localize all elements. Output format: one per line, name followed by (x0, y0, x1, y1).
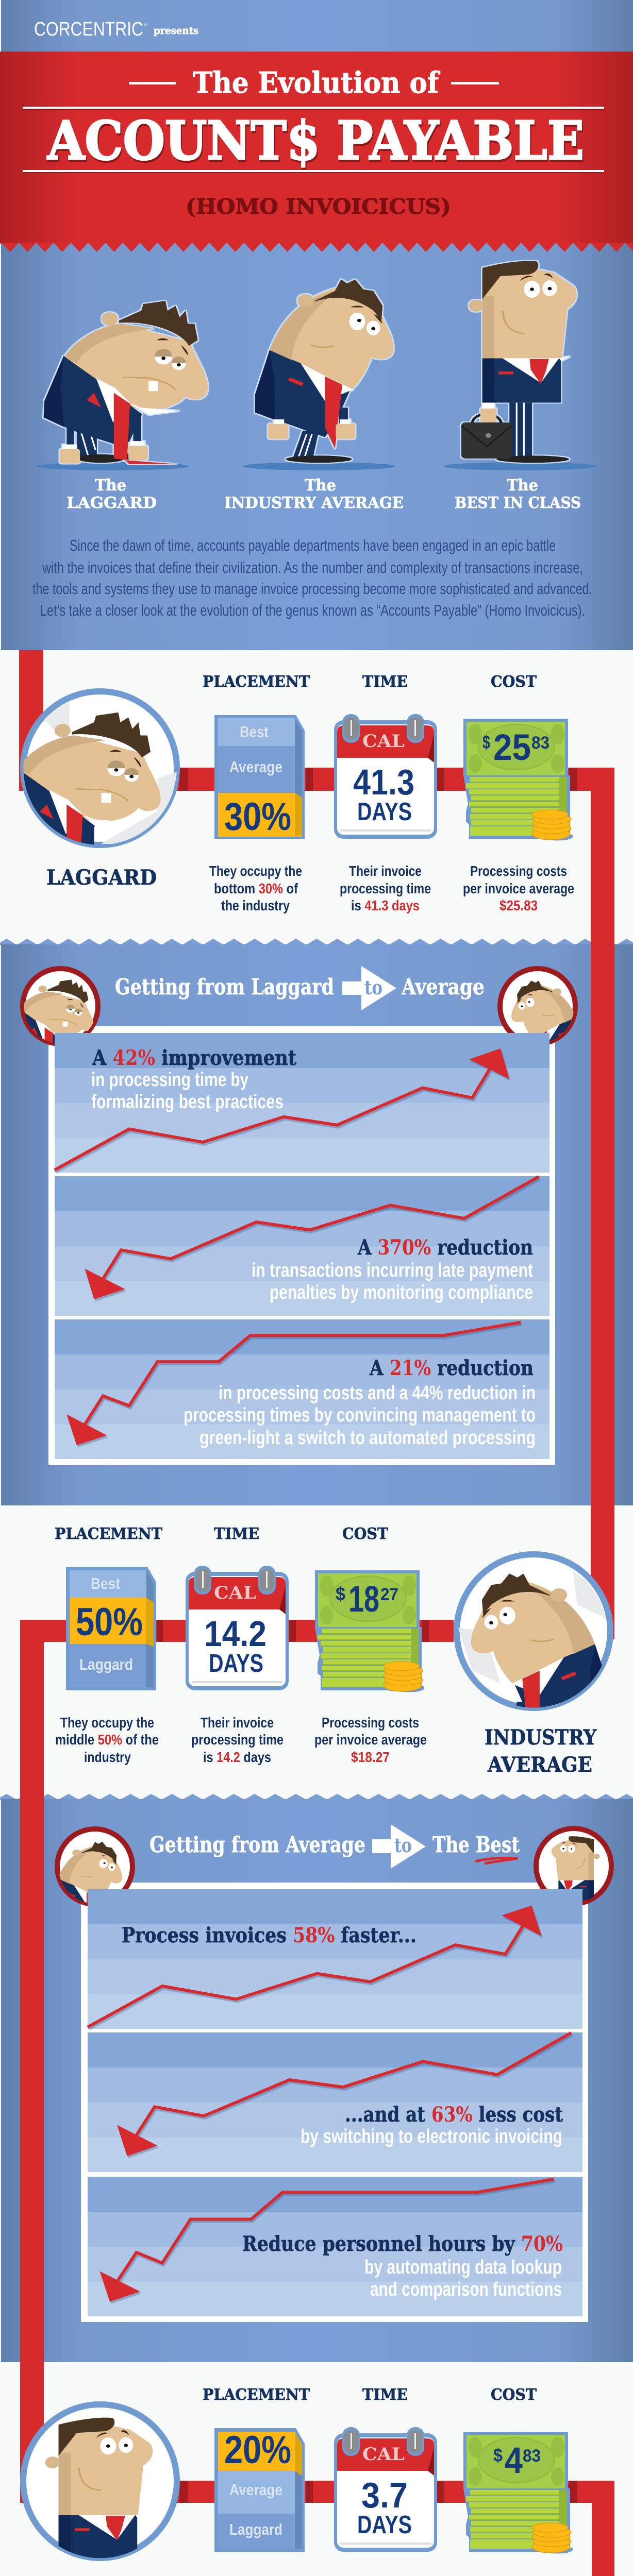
portrait: small average (497, 966, 578, 1045)
placement description (209, 863, 302, 913)
heading: Getting from Laggard (115, 974, 334, 999)
chart: 63% less cost: by switching to electronic invoicing (301, 2126, 562, 2147)
time description: is 41.3 days (351, 897, 420, 913)
money: $25.83 (463, 719, 573, 840)
chart: 370% reduction: penalties by monitoring compliance (270, 1282, 533, 1303)
placement description: They occupy the (60, 1715, 154, 1731)
column headings: COST (491, 2386, 537, 2404)
chart: 21% reduction: processing times by convincing management to (184, 1404, 536, 1426)
heading: Average (401, 974, 485, 999)
calendar: 41.3 days: CAL (362, 731, 405, 752)
chart: personnel hours 70%: Reduce personnel hours by 70% (242, 2232, 563, 2256)
placement tower: 30% (214, 715, 305, 839)
section background: laggard tips (0, 939, 633, 1505)
money: $25.83: 83 (531, 733, 549, 753)
calendar: 14.2 days: DAYS (209, 1650, 263, 1677)
time description (191, 1715, 284, 1765)
time description: Their invoice (201, 1715, 274, 1731)
portrait: industry average (454, 1551, 613, 1711)
banner: title red (0, 52, 633, 252)
panel: best in class stats (23, 2386, 574, 2576)
portrait: best (23, 2404, 177, 2576)
placement tower: 30%: Average (229, 758, 282, 776)
portrait: laggard (20, 688, 180, 848)
money: $4.83 (463, 2432, 573, 2553)
calendar: 14.2 days: CAL (214, 1583, 256, 1603)
placement description: bottom 30% of (214, 880, 298, 896)
panel: industry average stats (55, 1525, 610, 1777)
column headings (203, 673, 537, 691)
placement tower: 30%: Best (240, 723, 269, 741)
column headings: TIME (214, 1525, 259, 1543)
placement tower: 50%: 50% (76, 1600, 143, 1644)
placement tower: 20%: Laggard (229, 2520, 282, 2538)
logo: Corcentric presents: CORCENTRIC (34, 19, 143, 40)
money: $4.83: 83 (523, 2446, 541, 2466)
cost description (314, 1715, 427, 1765)
column headings: COST (491, 673, 537, 691)
character: the best in class: BEST IN CLASS (455, 494, 581, 512)
time description (340, 863, 431, 913)
chart: 21% reduction: A 21% reduction (369, 1356, 534, 1380)
placement tower: 30%: 30% (224, 795, 291, 839)
heading: to (364, 976, 382, 999)
calendar: 14.2 days (186, 1566, 289, 1690)
cost description: $18.27 (351, 1749, 390, 1765)
column headings: PLACEMENT (55, 1525, 163, 1543)
heading: to (394, 1834, 412, 1857)
cost description: Processing costs (322, 1715, 419, 1731)
character: the laggard (37, 301, 208, 512)
title: The Evolution of: The Evolution of (193, 66, 441, 100)
column headings (203, 2386, 537, 2404)
chart: 21% reduction: green-light a switch to automated processing (199, 1427, 536, 1449)
character: the laggard: The (95, 477, 126, 495)
heading (115, 966, 485, 1010)
time description: Their invoice (349, 863, 422, 879)
portrait: small best (534, 1826, 614, 1905)
chart frame (81, 1883, 588, 2322)
panel: getting from laggard to average (8, 966, 584, 1465)
money: $18.27: $ (336, 1583, 345, 1604)
section background: average tips (0, 1794, 633, 2362)
chart: personnel hours 70% (88, 2177, 582, 2316)
chart frame (48, 1026, 555, 1465)
intro paragraph (32, 536, 592, 619)
cost description: Processing costs (470, 863, 567, 879)
calendar: 3.7 days: 3.7 (361, 2475, 408, 2515)
placement tower: 20%: Average (229, 2481, 282, 2499)
column headings: TIME (362, 2386, 408, 2404)
red connector line (19, 650, 614, 2576)
money: $18.27: 18 (348, 1579, 379, 1620)
calendar: 3.7 days: DAYS (357, 2511, 412, 2539)
chart: 370% reduction: in transactions incurring late payment (252, 1260, 533, 1281)
placement description: They occupy the (209, 863, 302, 879)
chart: 370% reduction (55, 1176, 549, 1316)
logo: Corcentric presents: presents (154, 24, 198, 37)
column headings: COST (342, 1525, 389, 1543)
chart: 21% reduction (55, 1319, 549, 1459)
calendar: 3.7 days: CAL (362, 2444, 405, 2465)
time description: is 14.2 days (203, 1749, 271, 1765)
heading: The Best (432, 1832, 520, 1857)
money: $25.83: $ (482, 732, 490, 753)
character: the industry average: The (305, 477, 336, 495)
time description: processing time (191, 1732, 284, 1748)
chart: 42% improvement: formalizing best practices (91, 1091, 284, 1113)
chart: 58% faster (88, 1889, 582, 2029)
panel: getting from average to the best (51, 1824, 611, 2322)
chart: 63% less cost (88, 2032, 582, 2172)
chart: 21% reduction: in processing costs and a 44% reduction in (219, 1382, 536, 1404)
money: $25.83: 25 (493, 727, 531, 768)
time description: processing time (340, 880, 431, 896)
panel: laggard stats (0, 673, 574, 913)
placement description: the industry (221, 897, 290, 913)
heading (149, 1824, 520, 1869)
subtitle: Homo Invoicicus: (HOMO INVOICICUS) (186, 194, 451, 219)
column headings: PLACEMENT (203, 673, 310, 691)
calendar: 14.2 days: 14.2 (204, 1614, 266, 1654)
column headings: PLACEMENT (203, 2386, 310, 2404)
chart: 42% improvement: in processing time by (91, 1069, 248, 1091)
calendar: 41.3 days: 41.3 (353, 762, 414, 802)
cost description (463, 863, 574, 913)
portrait: small average (55, 1826, 135, 1906)
label: industry average (485, 1725, 596, 1777)
money: $4.83: 4 (505, 2441, 523, 2481)
label: industry average: AVERAGE (487, 1753, 592, 1777)
portrait: small laggard (20, 966, 101, 1046)
character: the industry average (224, 279, 404, 512)
chart: 63% less cost: ...and at 63% less cost (345, 2103, 563, 2127)
placement tower: 20%: 20% (224, 2428, 291, 2472)
calendar: 41.3 days: DAYS (357, 798, 412, 826)
chart: 42% improvement (55, 1033, 549, 1173)
placement description (55, 1715, 159, 1765)
cost description: per invoice average (314, 1732, 427, 1748)
heading: Getting from Average (149, 1832, 365, 1857)
money: $18.27: 27 (380, 1585, 398, 1604)
label: industry average: INDUSTRY (485, 1725, 596, 1750)
character: the best in class: The (507, 477, 538, 495)
column headings (55, 1525, 389, 1543)
placement tower: 50%: Best (91, 1574, 120, 1592)
placement tower: 20% (214, 2428, 305, 2552)
logo: Corcentric presents: ™ (143, 23, 148, 28)
cost description: $25.83 (499, 897, 538, 913)
calendar: 3.7 days (334, 2427, 437, 2552)
chart: personnel hours 70%: by automating data lookup (364, 2257, 562, 2278)
character: the best in class (444, 261, 596, 512)
money: $18.27 (315, 1570, 424, 1692)
column headings: TIME (362, 673, 408, 691)
label: laggard: LAGGARD (46, 866, 157, 890)
placement description: middle 50% of the (55, 1732, 159, 1748)
chart: personnel hours 70%: and comparison functions (370, 2279, 562, 2300)
character: the laggard: LAGGARD (66, 494, 157, 512)
chart: 370% reduction: A 370% reduction (357, 1235, 533, 1260)
placement description: industry (84, 1749, 131, 1765)
chart: 58% faster: Process invoices 58% faster... (122, 1923, 417, 1947)
placement tower: 50% (66, 1567, 156, 1690)
money: $4.83: $ (493, 2445, 503, 2466)
character: the industry average: INDUSTRY AVERAGE (224, 494, 404, 512)
chart: 42% improvement: A 42% improvement (92, 1046, 296, 1070)
section background: hero blue (1, 0, 633, 650)
title: Acount$ Payable: ACOUNT$ PAYABLE (47, 110, 584, 172)
placement tower: 50%: Laggard (79, 1655, 133, 1673)
calendar: 41.3 days (334, 714, 437, 839)
cost description: per invoice average (463, 880, 574, 896)
